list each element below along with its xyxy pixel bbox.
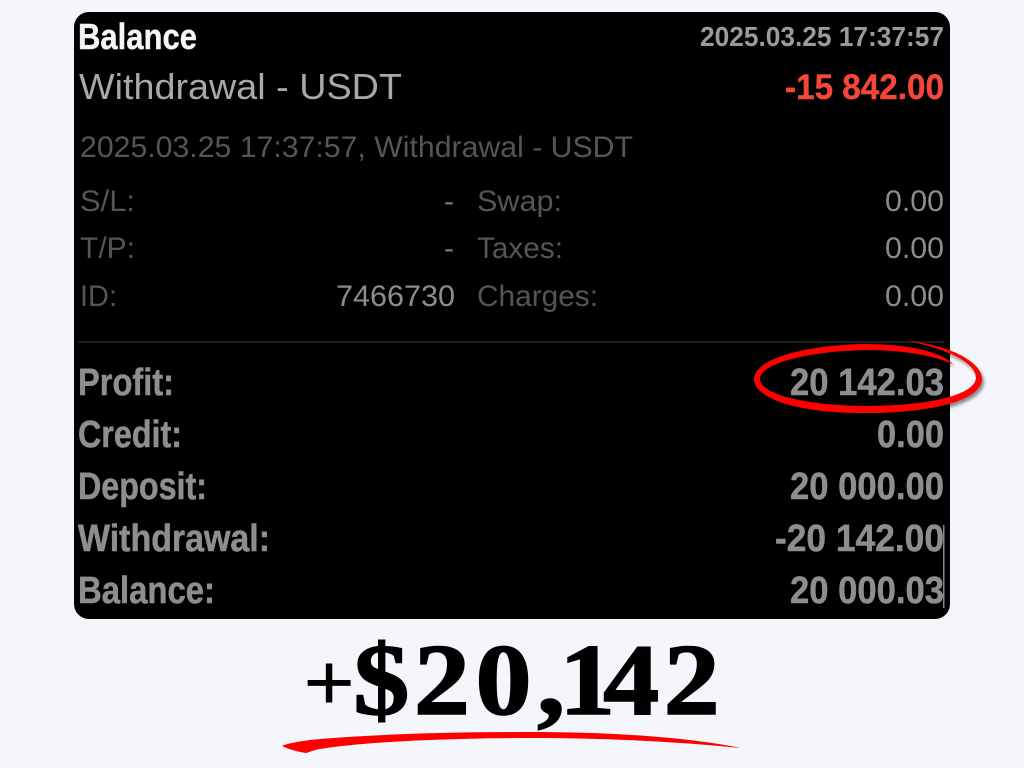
transaction title: Withdrawal - USDT — [79, 66, 402, 107]
summary totals: 0.00 — [877, 414, 944, 456]
summary totals: 20 142.03 — [790, 362, 944, 404]
summary totals: 20 000.00 — [790, 466, 944, 508]
headline profit figure: + — [303, 637, 355, 730]
details table: 0.00 — [885, 185, 944, 218]
summary totals: -20 142.00 — [775, 518, 944, 560]
details table: 0.00 — [885, 280, 944, 313]
panel: account statement screenshot — [74, 12, 950, 619]
red underline stroke — [282, 732, 741, 753]
transaction amount: -15 842.00 — [785, 68, 944, 107]
details table: T/P: — [80, 232, 135, 265]
summary totals: Deposit: — [78, 466, 207, 508]
summary totals: Credit: — [78, 414, 182, 456]
details table: Charges: — [477, 280, 598, 313]
summary totals: Profit: — [78, 362, 174, 404]
details table: 7466730 — [336, 280, 455, 313]
header: timestamp: 2025.03.25 17:37:57 — [700, 21, 944, 52]
details table — [80, 185, 944, 313]
headline profit figure: $20,142 — [353, 624, 720, 737]
details table: - — [444, 232, 454, 265]
transaction description: 2025.03.25 17:37:57, Withdrawal - USDT — [80, 131, 633, 164]
details table: 0.00 — [885, 232, 944, 265]
header: balance label: Balance — [78, 16, 197, 57]
summary totals: Balance: — [78, 570, 215, 612]
details table: ID: — [80, 280, 117, 313]
summary totals — [78, 362, 944, 612]
summary totals: Withdrawal: — [78, 518, 270, 560]
details table: - — [444, 185, 454, 218]
details table: S/L: — [80, 185, 135, 218]
summary totals: 20 000.03 — [790, 570, 944, 612]
details table: Taxes: — [477, 232, 563, 265]
hand-drawn red circle around profit — [754, 341, 982, 413]
details table: Swap: — [477, 185, 562, 218]
